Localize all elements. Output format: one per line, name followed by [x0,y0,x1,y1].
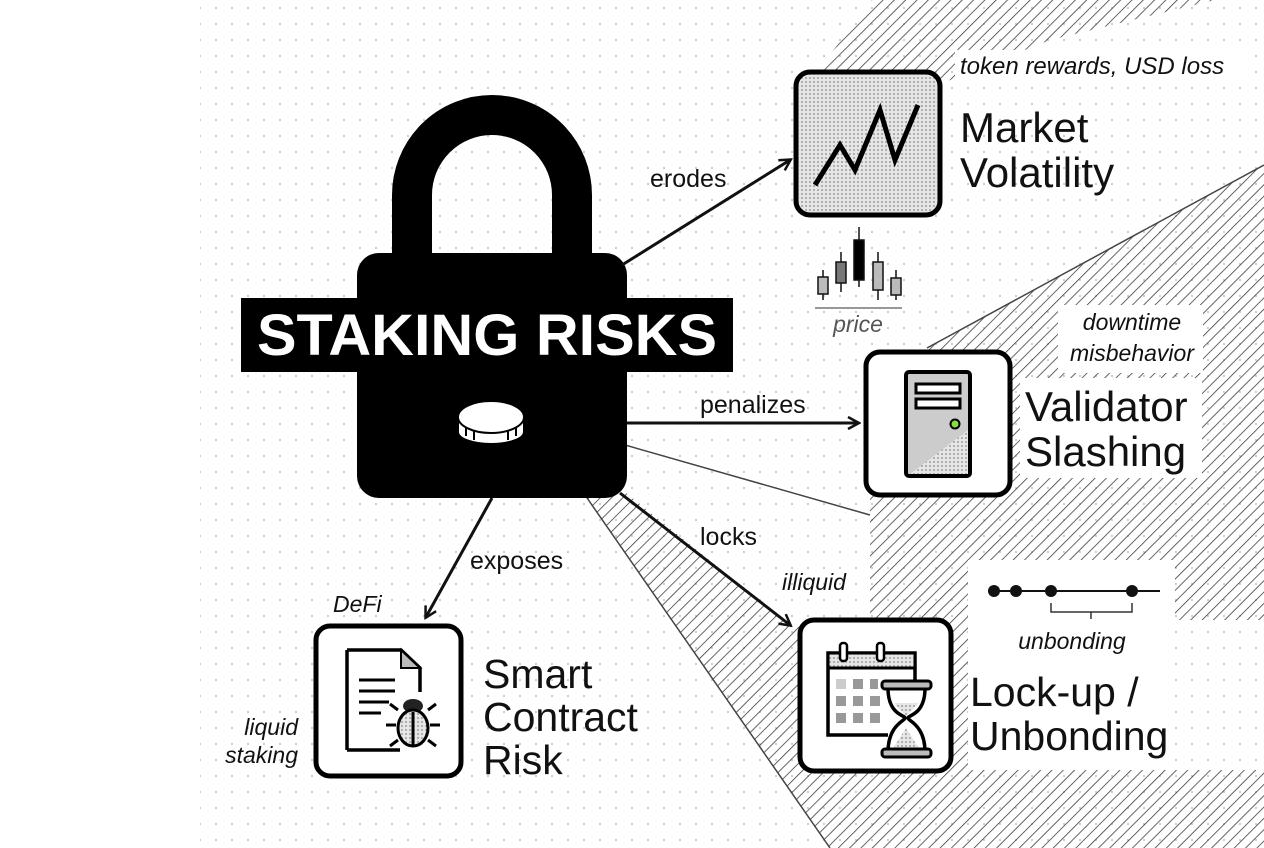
heading: smart contract risk: Risk [483,737,563,783]
icon: candlesticks [815,227,902,308]
note: token rewards: token rewards, USD loss [960,53,1224,80]
note: illiquid: illiquid [782,569,847,595]
arrow: erodes [622,160,790,265]
hatched background: top wedge [795,0,1215,100]
note: liquid staking: liquid [244,714,298,740]
heading: validator slashing: Validator [1025,383,1188,430]
heading: market volatility: Market [960,104,1088,151]
arrow: exposes: exposes [470,547,563,575]
note: liquid staking: staking [225,742,298,768]
heading: validator slashing: Slashing [1025,428,1186,475]
heading: market volatility: Volatility [960,149,1114,196]
arrow: exposes [426,498,563,617]
icon: coin [458,401,524,444]
white backing: token rewards [955,50,1247,82]
heading: lock-up / unbonding: Lock-up / [970,669,1139,715]
central lock [241,115,733,498]
icon: calendar and hourglass [828,643,931,757]
heading: smart contract risk: Contract [483,694,639,740]
arrow: locks [620,493,790,625]
card: lock-up [800,620,951,771]
note: downtime misbehavior: misbehavior [1070,340,1195,366]
label: price: price [832,311,883,337]
heading: lock-up / unbonding: Unbonding [970,713,1168,759]
note: downtime misbehavior: downtime [1083,309,1181,335]
arrow: erodes: erodes [650,165,726,193]
card: smart contract [316,626,461,776]
note: DeFi: DeFi [333,591,382,617]
icon: zigzag chart [815,105,918,185]
diagram: unbonding timeline [988,585,1160,654]
title band: STAKING RISKS [257,303,717,368]
card: market volatility [796,72,940,215]
arrow: penalizes: penalizes [700,391,806,419]
card: validator slashing [866,352,1010,495]
hatched background: lower region [585,165,1264,848]
heading: smart contract risk: Smart [483,651,592,697]
icon: server [906,372,970,476]
arrow: locks: locks [700,523,757,551]
diagram: unbonding timeline: unbonding [1018,628,1126,654]
icon: document with bug [347,650,440,750]
